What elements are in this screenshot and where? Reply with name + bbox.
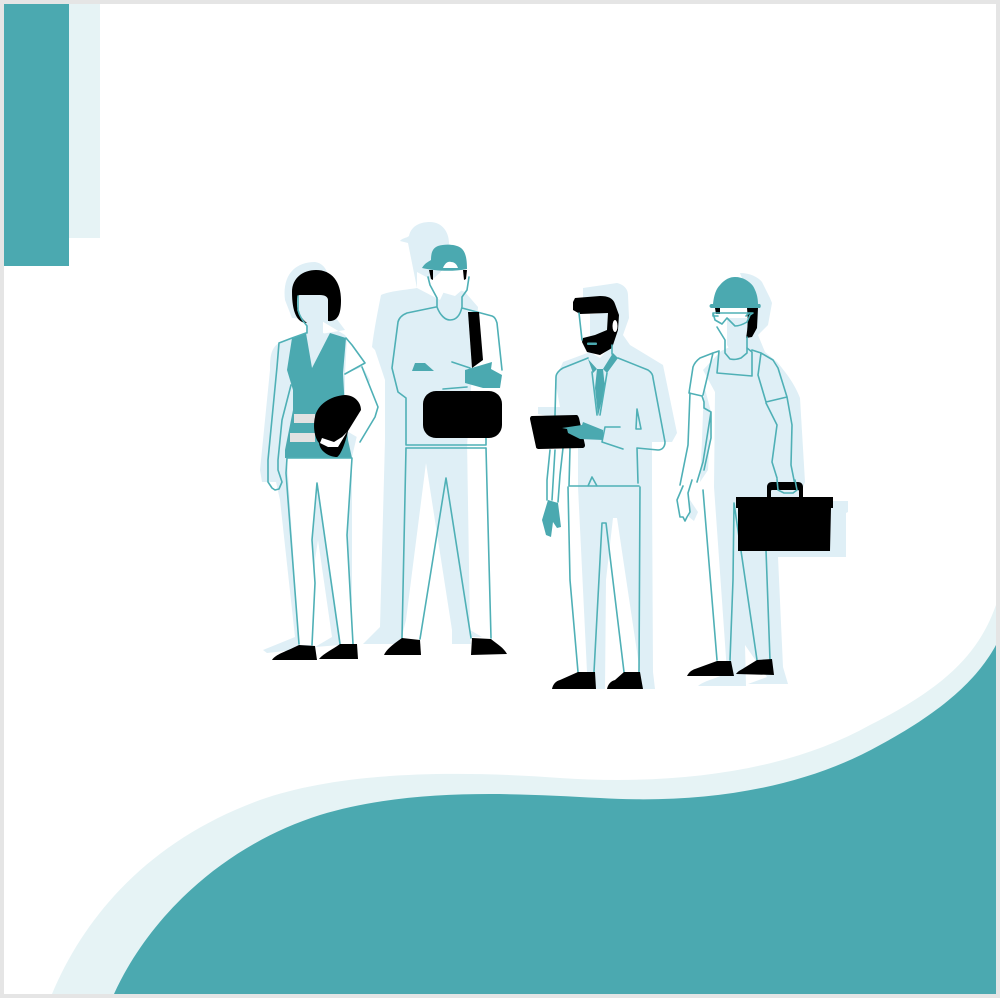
man shadow [363,222,482,644]
woman black helmet [314,395,361,457]
man shoes [384,638,507,655]
man crossed arm lines [443,362,470,389]
man sleeve patch [412,363,434,371]
bearded man teal hand on tablet [562,422,603,440]
toolbox [736,482,833,551]
hard hat woman shoes [687,659,774,676]
bearded man face outline [579,313,612,354]
woman hair [292,270,341,323]
figure: bearded man with tablet [530,283,677,689]
woman vest reflective stripes [290,414,315,442]
hard hat woman hand shadow [689,500,698,521]
hard hat woman uniform outline [680,348,795,485]
bearded man jacket outline [547,358,665,502]
woman shoes [272,644,358,660]
bearded man mouth [587,342,597,345]
man teal hand [465,362,502,388]
woman shadow [260,262,370,653]
hard hat woman shadow [698,273,805,686]
bearded man shoes [552,672,643,689]
bearded man tie [595,369,605,416]
man hair sides [429,270,467,280]
woman arm outlines [268,333,378,645]
bearded man teal hanging hand [542,500,561,537]
bottom light wave [52,605,996,994]
hard hat woman trousers outline [703,490,770,660]
bearded man hair and beard [573,296,619,355]
figure: woman with hard hat and toolbox [677,273,848,686]
man cap [422,245,467,271]
bearded man black tablet [530,415,585,449]
bearded man face shading [590,314,608,338]
bottom teal wave [114,645,996,994]
top left teal bar [4,4,69,266]
hard hat woman arm shading [700,385,711,482]
woman face and neck [298,296,330,368]
bearded man shadow torso [538,283,677,689]
hard hat woman left hand [677,480,692,521]
safety goggles [713,313,753,326]
man bag strap [468,312,483,368]
hard hat [710,277,761,308]
man neck and shirt outline [392,277,502,448]
toolbox shadow [750,501,848,557]
hard hat woman face shading [727,318,747,358]
man cap strap opening [443,262,458,268]
hard hat woman face outline [717,327,747,359]
top left light bar [69,4,100,238]
bearded man collar [588,353,618,373]
man trousers outline [402,448,491,639]
woman face outline [298,296,307,333]
woman vest [285,333,352,458]
hand on toolbox handle [777,479,797,493]
figure: woman with vest and helmet [260,262,378,660]
woman hand on helmet [320,432,347,447]
man torso shading [393,307,470,447]
figure: man with cap and bag [363,222,507,655]
hard hat woman hair [715,308,758,338]
man black bag [423,391,502,438]
woman sleeve and arm [345,338,378,440]
bearded man ear [612,320,618,332]
man face white area [441,271,463,296]
bearded man trousers outline [568,487,640,672]
woman trouser white fill [287,458,353,645]
